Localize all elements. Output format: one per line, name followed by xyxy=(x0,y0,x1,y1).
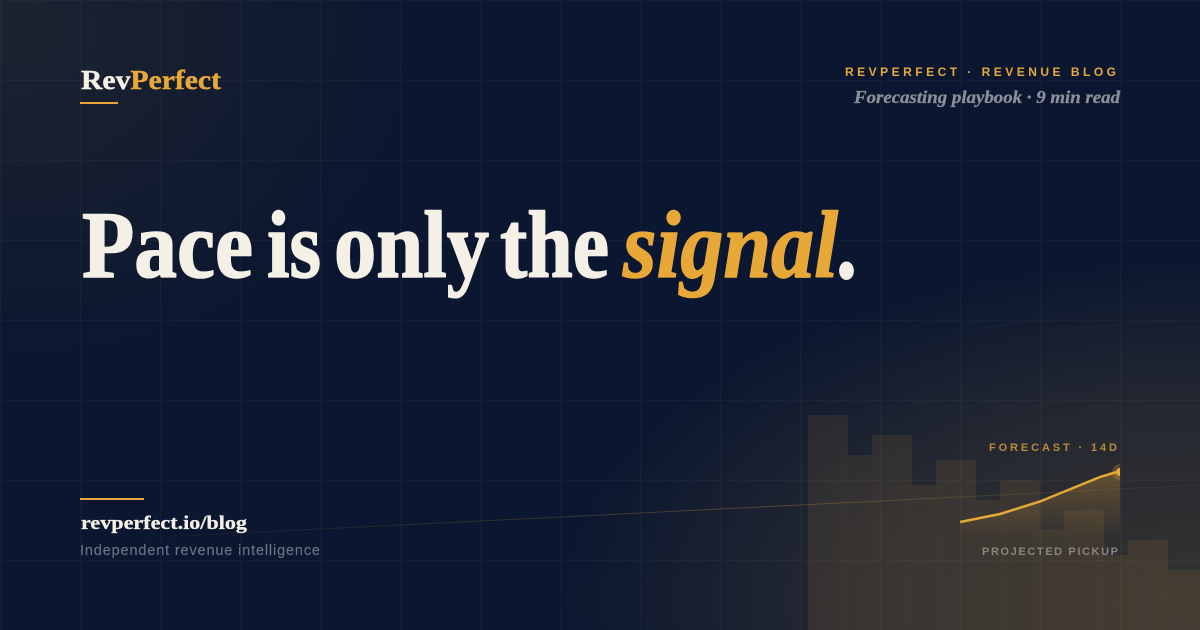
headline: . xyxy=(837,192,856,298)
headline: signal xyxy=(622,192,839,298)
footer rule xyxy=(80,498,144,500)
chart label: forecast: FORECAST · 14D xyxy=(989,442,1117,454)
headline: is xyxy=(267,192,321,298)
headline: the xyxy=(500,192,609,298)
headline xyxy=(82,192,856,298)
chart label: projected pickup: PROJECTED PICKUP xyxy=(982,546,1118,558)
footer url: revperfect.io/blog xyxy=(81,513,248,534)
header kicker: REVPERFECT · REVENUE BLOG xyxy=(845,65,1116,79)
headline: only xyxy=(334,192,489,298)
bar chart: background bars xyxy=(808,415,1200,630)
logo: RevPerfect xyxy=(81,65,221,95)
forecast line chart xyxy=(960,464,1120,530)
footer tagline: Independent revenue intelligence xyxy=(80,543,320,559)
trend thread line xyxy=(100,485,1200,540)
headline: Pace xyxy=(82,192,253,298)
header subline: Forecasting playbook · 9 min read xyxy=(853,87,1121,107)
